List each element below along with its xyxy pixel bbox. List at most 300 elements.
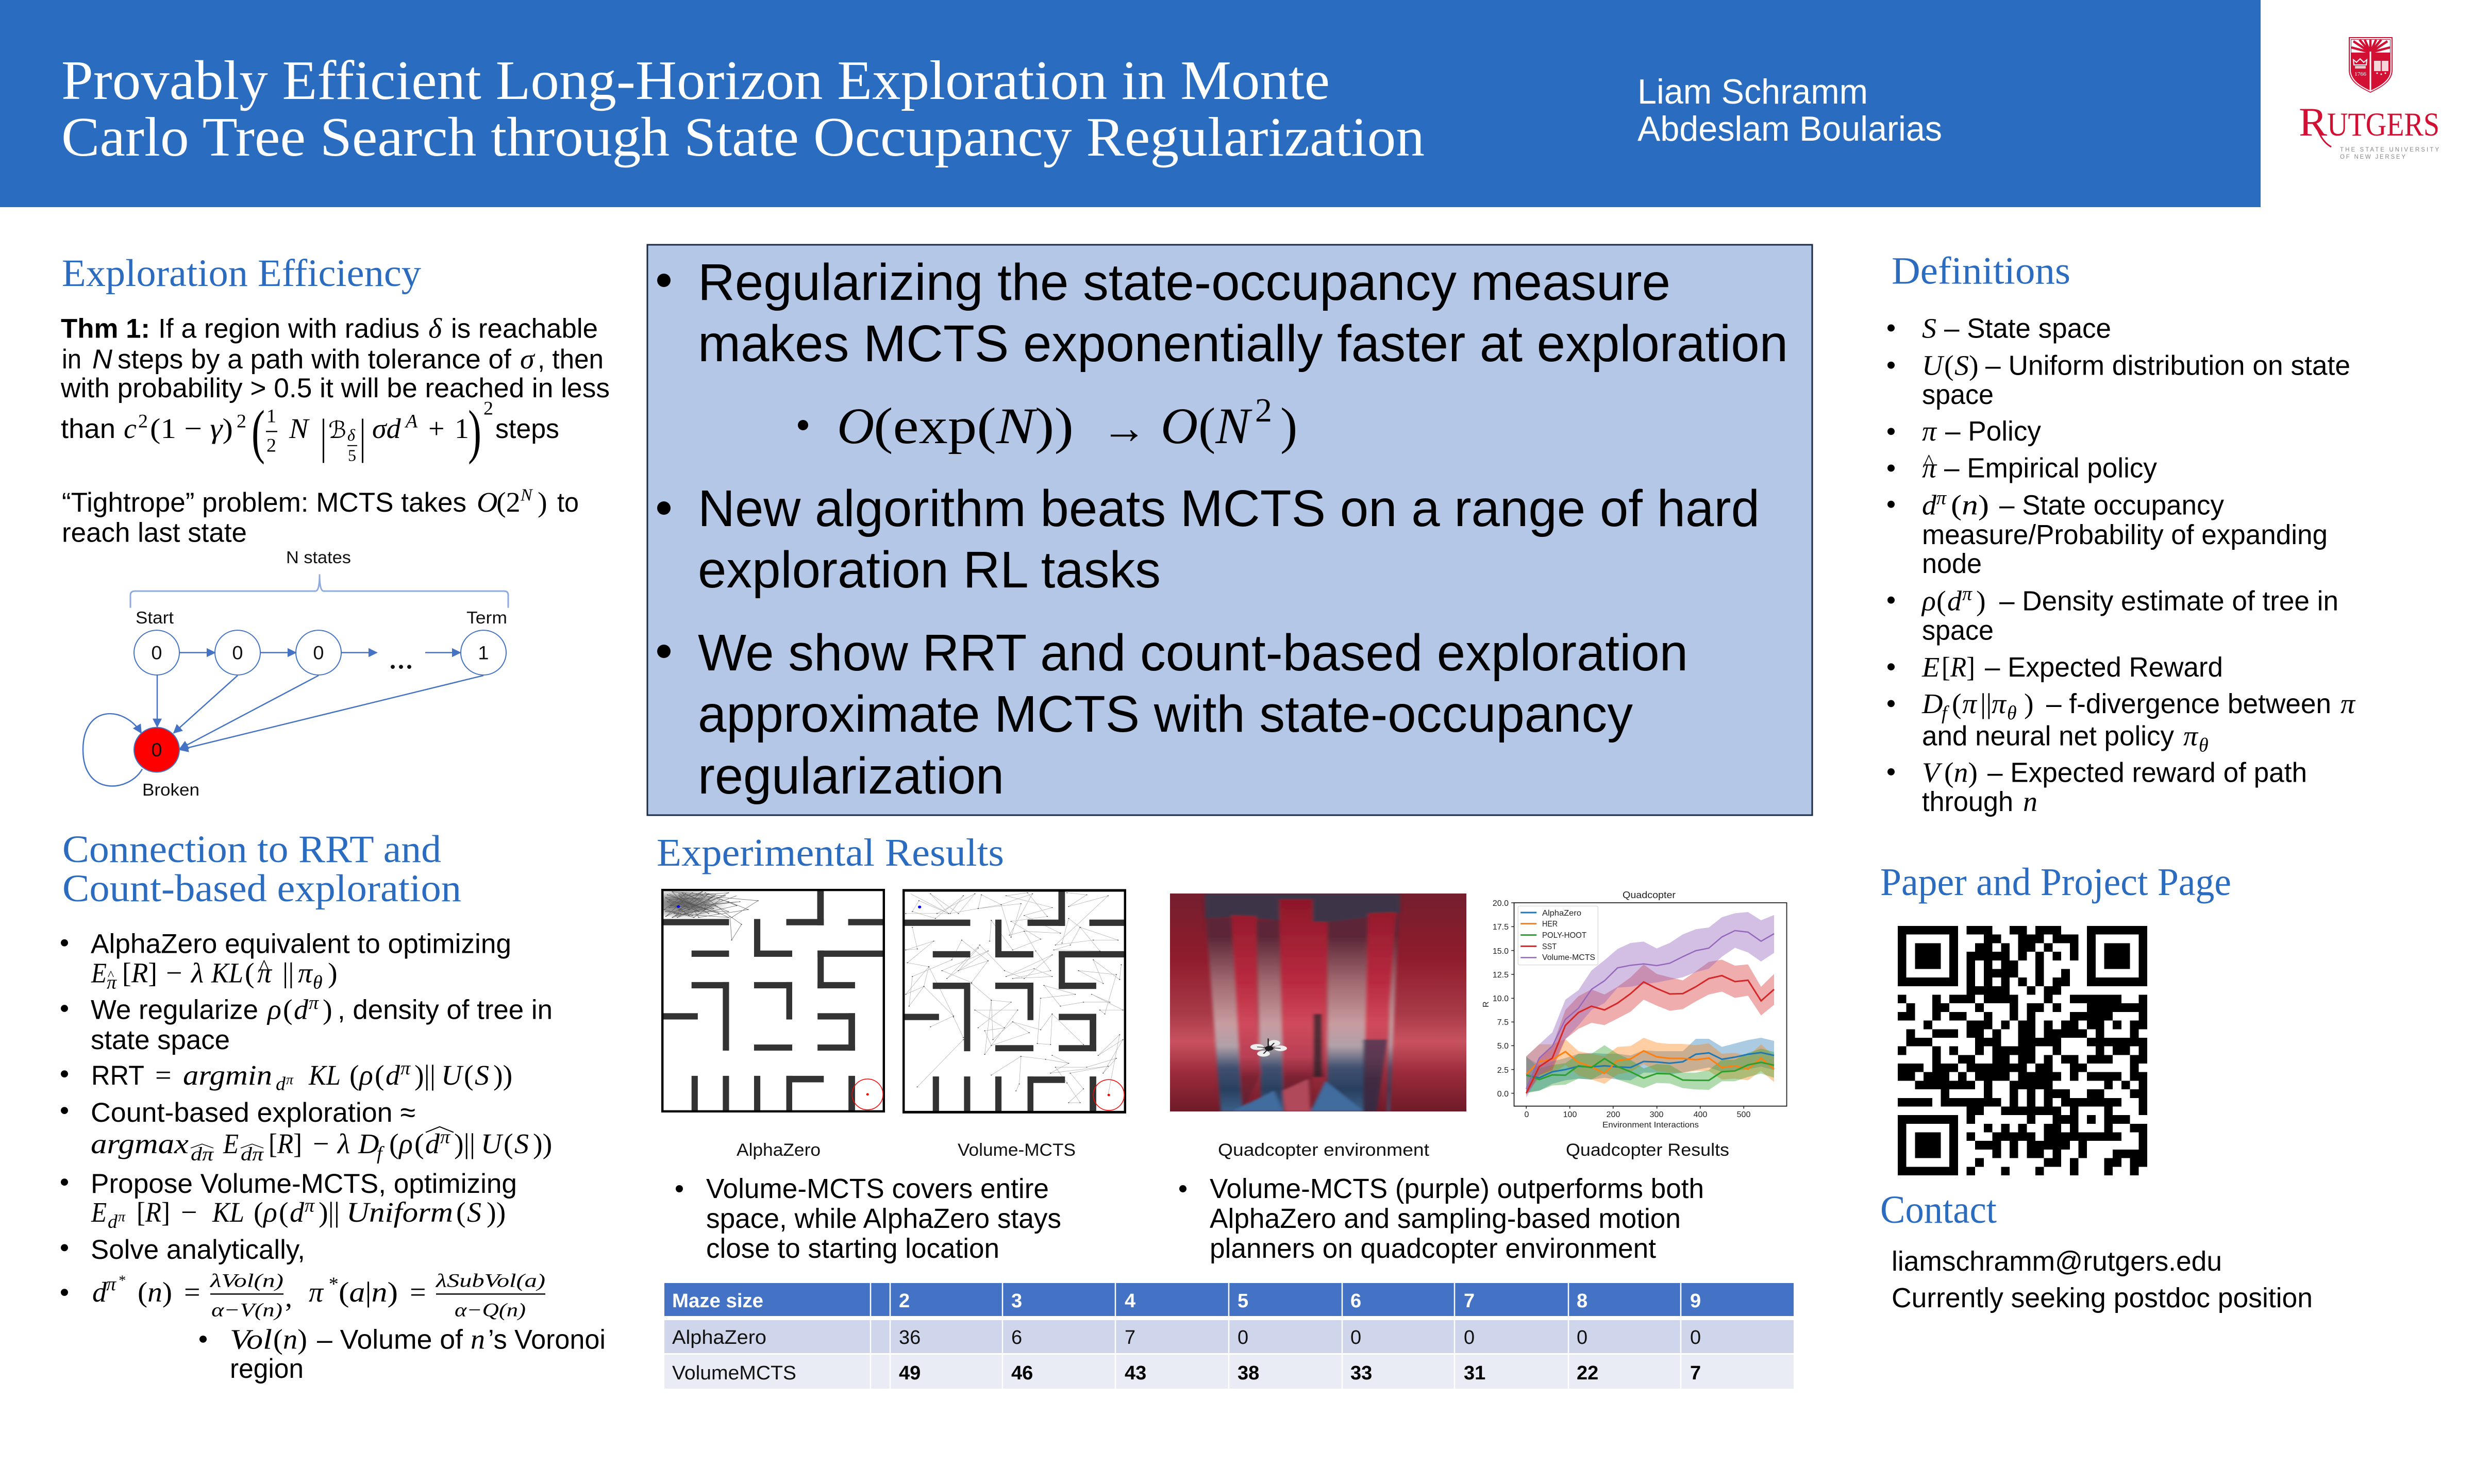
panel: connection to RRT	[61, 828, 606, 1384]
tightrope text: (2	[496, 486, 521, 518]
logo: Rutgers	[2299, 37, 2439, 160]
sub-bullet: Vol definition: – Volume of	[317, 1324, 463, 1355]
bullet: RRT: (	[464, 1059, 474, 1091]
bullet: Volume-MCTS objective: −	[181, 1196, 197, 1228]
line chart: quadcopter results: 10.0	[1493, 994, 1509, 1003]
bullet: count-based exploration: ))	[533, 1128, 552, 1160]
theorem text: steps by a path with tolerance of	[118, 344, 511, 375]
table: maze results: 6	[1350, 1290, 1361, 1312]
definitions list: d	[1947, 585, 1962, 617]
definitions list: V	[1922, 757, 1943, 789]
bullet: RRT: KL	[308, 1059, 341, 1091]
bullet: AlphaZero objective: ^	[259, 955, 269, 978]
diagram: tightrope chain	[83, 548, 508, 800]
line chart: quadcopter results: HER	[1542, 920, 1558, 929]
tightrope text: “Tightrope” problem: MCTS takes	[62, 487, 466, 518]
tightrope text	[62, 486, 579, 548]
table: maze results: 0	[1464, 1327, 1475, 1348]
bullet: RRT: d	[276, 1073, 286, 1095]
bullet: AlphaZero objective	[61, 929, 511, 993]
table: maze results: 46	[1011, 1362, 1033, 1384]
line chart: quadcopter results: Quadcopter	[1623, 890, 1676, 900]
takeaway 2: exploration RL tasks	[698, 541, 1161, 599]
definitions list: – Empirical policy	[1944, 453, 2157, 483]
table: maze results: 0	[1350, 1327, 1361, 1348]
bullet: closed-form equations: λVol(n)	[210, 1270, 283, 1291]
definitions list: through	[1922, 786, 2013, 817]
line chart: quadcopter results: 500	[1737, 1110, 1750, 1119]
QR code	[1898, 926, 2147, 1175]
takeaway 1	[657, 254, 1788, 373]
definitions list: π	[1936, 487, 1947, 509]
wordmark: UTGERS	[2327, 106, 2439, 143]
theorem text: (	[252, 399, 265, 465]
definitions list: )	[1976, 585, 1986, 617]
definitions list: ^	[1924, 450, 1934, 473]
definitions list: ρ	[1921, 585, 1936, 617]
theorem text: 2	[266, 435, 276, 457]
bullet: AlphaZero objective: π	[257, 957, 273, 989]
bullet: Volume-MCTS objective: KL	[212, 1196, 244, 1228]
line chart: quadcopter results: 100	[1563, 1110, 1577, 1119]
bullet: count-based exploration: U	[481, 1128, 504, 1160]
diagram: tightrope chain: 0	[232, 642, 243, 663]
bullet: Volume-MCTS objective: π	[118, 1209, 126, 1225]
theorem text: is reachable	[451, 313, 598, 344]
theorem text: σd	[372, 413, 401, 445]
bullet: regularize density: (	[283, 994, 293, 1026]
table: maze results: 43	[1125, 1362, 1146, 1384]
definitions list: S	[1954, 350, 1969, 381]
tightrope text: to	[557, 487, 579, 518]
theorem text: ℬ	[328, 416, 346, 444]
bullet: RRT: (	[375, 1059, 385, 1091]
tightrope text: N	[520, 486, 533, 504]
bullet: Volume-MCTS objective: E	[91, 1196, 107, 1228]
bullet: quadcopter finding: AlphaZero and sampling-based motion	[1210, 1203, 1681, 1234]
bullet: AlphaZero objective: AlphaZero equivalent to optimizing	[91, 929, 511, 959]
bullet: regularize density: , density of tree in	[338, 994, 553, 1025]
table: maze results: 36	[899, 1327, 921, 1348]
bullet: Volume-MCTS objective: [R]	[137, 1196, 170, 1228]
definitions list: π	[2183, 720, 2199, 752]
definitions list: – Expected reward of path	[1987, 757, 2307, 788]
definitions list: d	[1922, 490, 1936, 521]
theorem text: σ	[520, 343, 536, 375]
bullet: count-based exploration: )||	[454, 1128, 475, 1160]
theorem text: A	[404, 410, 418, 432]
theorem text: 1	[266, 406, 276, 427]
theorem text: , then	[538, 344, 604, 375]
bullet: AlphaZero objective: )	[328, 957, 338, 989]
table: maze results: 22	[1577, 1362, 1598, 1384]
table: maze results: 6	[1011, 1327, 1022, 1348]
bullet: AlphaZero objective: λ	[190, 957, 204, 989]
definitions list: measure/Probability of expanding	[1922, 519, 2328, 550]
complexity formula: (exp( N))	[874, 397, 1074, 454]
table: maze results: 7	[1464, 1290, 1475, 1312]
theorem text: with probability > 0.5 it will be reached in less	[60, 373, 610, 403]
bullet: closed-form equations: π	[309, 1276, 324, 1308]
heading: Contact	[1880, 1188, 1997, 1232]
bullet: regularize density: )	[323, 994, 332, 1026]
definitions list: (	[1944, 350, 1954, 381]
bullet: closed-form equations: ,	[285, 1281, 292, 1313]
heading: Exploration Efficiency	[62, 252, 421, 295]
line chart: quadcopter results: 200	[1607, 1110, 1620, 1119]
heading: Experimental Results	[657, 831, 1004, 874]
definitions list: U	[1922, 350, 1945, 381]
panel: contact	[1880, 1188, 2313, 1313]
title: Provably Efficient Long-Horizon Exploration in Monte	[61, 50, 1330, 111]
line chart: quadcopter results: 400	[1694, 1110, 1707, 1119]
definitions list: π	[1992, 688, 2007, 720]
bullet: closed-form equations: π	[106, 1273, 116, 1295]
table: maze results: AlphaZero	[672, 1327, 766, 1348]
bullet: AlphaZero objective: [R]	[122, 957, 157, 989]
line chart: quadcopter results: 7.5	[1497, 1018, 1509, 1027]
bullet: maze finding	[676, 1173, 1061, 1264]
line chart: quadcopter results: Volume-MCTS	[1542, 953, 1595, 962]
bullet: Volume-MCTS objective: (	[279, 1196, 289, 1228]
bullet: regularize density: state space	[91, 1024, 230, 1055]
bullet: count-based exploration: (	[414, 1128, 424, 1160]
bullet: RRT: S	[475, 1059, 489, 1091]
theorem text: c	[124, 413, 137, 445]
complexity formula	[798, 392, 1297, 454]
line chart: quadcopter results: SST	[1542, 942, 1557, 951]
definitions list: node	[1922, 548, 1982, 579]
contact details: Currently seeking postdoc position	[1892, 1283, 2313, 1313]
maze: AlphaZero	[661, 889, 885, 1112]
takeaway 2	[657, 480, 1760, 599]
complexity formula: (N	[1198, 397, 1252, 454]
bullet: Volume-MCTS objective: (	[254, 1196, 263, 1228]
takeaway 3: We show RRT and count-based exploration	[698, 624, 1688, 682]
bullet: RRT: d	[386, 1059, 400, 1091]
sub-bullet: Vol definition: (n)	[273, 1324, 307, 1355]
bullet: closed-form equations: d	[92, 1276, 107, 1308]
diagram: tightrope chain: 0	[313, 642, 324, 663]
table: maze results	[664, 1283, 1794, 1389]
table: maze results: 9	[1690, 1290, 1701, 1312]
bullet: closed-form equations: α−V(n)	[211, 1300, 282, 1321]
heading: Paper and Project Page	[1880, 861, 2231, 904]
line chart: quadcopter results: 20.0	[1493, 899, 1509, 908]
line chart: quadcopter results: R	[1482, 1001, 1491, 1007]
bullet: RRT: ))	[493, 1059, 512, 1091]
bullet: AlphaZero objective: ||	[282, 957, 294, 989]
definitions list: π	[1962, 583, 1972, 605]
bullet: AlphaZero objective: KL	[211, 957, 243, 989]
definitions list: – f-divergence between	[2046, 688, 2331, 719]
table: maze results: 0	[1577, 1327, 1587, 1348]
bullet: regularize density: π	[309, 992, 319, 1014]
bullet: RRT: π	[286, 1072, 294, 1088]
takeaway 3: regularization	[698, 747, 1004, 805]
bullet: Volume-MCTS objective: ))	[487, 1196, 506, 1228]
theorem text: N	[92, 344, 112, 375]
heading: Definitions	[1892, 250, 2070, 292]
bullet: count-based exploration: f	[377, 1142, 385, 1164]
bullet: RRT: argmin	[183, 1059, 272, 1091]
table: maze results: 2	[899, 1290, 910, 1312]
definitions list: E	[1921, 651, 1940, 683]
definitions list: – Uniform distribution on state	[1985, 350, 2350, 381]
bullet: count-based exploration: (	[389, 1128, 399, 1160]
bullet: closed-form equations: λSubVol(a)	[436, 1270, 545, 1291]
definitions list: space	[1922, 615, 1994, 646]
theorem text	[60, 313, 610, 465]
sub-bullet: Vol definition: ’s Voronoi	[488, 1324, 606, 1355]
bullet: maze finding: Volume-MCTS covers entire	[706, 1173, 1049, 1204]
panel: exploration efficiency	[60, 252, 610, 800]
complexity formula: )	[1280, 397, 1297, 454]
bullet: count-based exploration: −	[313, 1128, 329, 1160]
bullet: closed-form equations	[61, 1270, 545, 1321]
definitions list: – Expected Reward	[1985, 652, 2223, 683]
bullet: closed-form equations: =	[184, 1276, 200, 1308]
bullet: count-based exploration: dπ	[241, 1143, 264, 1165]
authors: Abdeslam Boularias	[1637, 109, 1942, 148]
definitions list: ||	[1980, 688, 1992, 720]
table: maze results: 0	[1690, 1327, 1701, 1348]
bullet: RRT: ρ	[358, 1059, 373, 1091]
definitions list: π	[1922, 415, 1937, 447]
diagram: tightrope chain: Term	[466, 608, 507, 628]
icon: shield: 1766	[2354, 71, 2367, 77]
table: maze results: 8	[1577, 1290, 1587, 1312]
authors	[1637, 72, 1942, 148]
line chart: quadcopter results: 0	[1525, 1110, 1529, 1119]
contact details	[1892, 1246, 2313, 1313]
bullet: count-based exploration: dπ	[191, 1143, 214, 1165]
wordmark: R	[2299, 99, 2327, 144]
caption: quadcopter environment: Quadcopter environment	[1218, 1140, 1430, 1160]
table: maze results: 33	[1350, 1362, 1372, 1384]
definitions list: n	[2023, 786, 2037, 818]
bullet: closed-form equations: (a|n)	[339, 1276, 398, 1308]
panel: key takeaways	[647, 245, 1812, 815]
table: maze results: VolumeMCTS	[672, 1362, 796, 1384]
bullet: RRT: (	[349, 1059, 359, 1091]
bullet: Volume-MCTS objective: Uniform	[346, 1196, 453, 1228]
bullet: count-based exploration: Count-based exploration ≈	[91, 1097, 415, 1128]
bullet: solve analytically: Solve analytically,	[91, 1234, 305, 1265]
wordmark: THE STATE UNIVERSITY	[2340, 147, 2439, 153]
line chart: quadcopter results: 5.0	[1497, 1042, 1509, 1051]
theorem text: δ	[347, 426, 356, 444]
table: maze results: 7	[1125, 1327, 1135, 1348]
bullet: regularize density: d	[294, 994, 308, 1026]
definitions list: f	[1942, 702, 1949, 724]
table: maze results: 38	[1238, 1362, 1259, 1384]
takeaway 3	[657, 624, 1688, 805]
bullet: regularize density: ρ	[266, 994, 281, 1026]
bullet: Volume-MCTS objective: ρ	[262, 1196, 277, 1228]
definitions list: π	[1962, 688, 1978, 720]
complexity formula: O	[1161, 397, 1198, 454]
bullet: quadcopter finding: Volume-MCTS (purple) outperforms both	[1210, 1173, 1704, 1204]
line chart: quadcopter results: 12.5	[1493, 971, 1509, 980]
bullet: Volume-MCTS objective: (	[456, 1196, 466, 1228]
complexity formula: 2	[1255, 392, 1272, 429]
line chart: quadcopter results: 0.0	[1497, 1090, 1509, 1099]
takeaway 1: Regularizing the state-occupancy measure	[698, 254, 1670, 311]
table: maze results: 4	[1125, 1290, 1135, 1312]
table: maze results: 7	[1690, 1362, 1701, 1384]
definitions list: [R]	[1942, 651, 1975, 683]
definitions list: θ	[2007, 702, 2017, 724]
caption: quadcopter results: Quadcopter Results	[1566, 1140, 1729, 1160]
definitions list: π	[2341, 688, 2356, 720]
bullet: Volume-MCTS objective: d	[108, 1211, 118, 1233]
panel: definitions	[1887, 250, 2356, 818]
definitions list: – State occupancy	[1999, 490, 2224, 520]
table: maze results: 31	[1464, 1362, 1485, 1384]
heading: Connection to RRT and	[62, 828, 441, 871]
bullet: regularize density: We regularize	[91, 994, 258, 1025]
theorem text: δ	[428, 313, 442, 344]
bullet: count-based exploration: λ	[337, 1128, 350, 1160]
bullet: Volume-MCTS objective	[61, 1168, 517, 1233]
table: maze results: 3	[1011, 1290, 1022, 1312]
definitions list: space	[1922, 379, 1994, 410]
theorem text: 2	[237, 410, 246, 432]
title	[61, 50, 1425, 168]
diagram: tightrope chain: N states	[286, 548, 351, 567]
theorem text: 2	[138, 410, 148, 432]
definitions list: (	[1936, 585, 1946, 617]
table: maze results: 5	[1238, 1290, 1248, 1312]
bullet: AlphaZero objective: ^	[108, 968, 114, 983]
bullet: closed-form equations: (n)	[138, 1276, 172, 1308]
bullet: count-based exploration: argmax	[91, 1128, 189, 1160]
theorem text: in	[62, 344, 81, 375]
theorem text: N	[289, 413, 310, 445]
theorem text: )	[468, 399, 481, 465]
definitions list: and neural net policy	[1922, 721, 2174, 751]
table: maze results: Maze size	[672, 1290, 763, 1312]
definitions list: – Policy	[1945, 416, 2041, 447]
tightrope text: O	[477, 486, 497, 518]
bullet: AlphaZero objective: −	[166, 957, 182, 989]
theorem text: steps	[495, 413, 559, 444]
complexity formula: →	[1101, 403, 1147, 453]
bullet: Volume-MCTS objective: )||	[319, 1196, 340, 1228]
panel: paper and project page	[1880, 861, 2231, 1175]
image: quadcopter environment	[1170, 893, 1466, 1111]
bullet: closed-form equations: *	[118, 1273, 125, 1288]
theorem text: 2	[483, 398, 493, 419]
bullet: AlphaZero objective: E	[91, 957, 107, 989]
bullet: count-based exploration: (	[504, 1128, 513, 1160]
theorem text: (1 − γ)	[150, 413, 233, 445]
tightrope text: )	[538, 486, 547, 518]
theorem text: 1	[455, 413, 469, 445]
bullet: RRT	[61, 1057, 512, 1095]
definitions list: (n)	[1951, 490, 1989, 521]
line chart: quadcopter results: 2.5	[1497, 1066, 1509, 1075]
maze: Volume-MCTS	[902, 889, 1126, 1114]
bullet: RRT: π	[400, 1057, 411, 1079]
definitions list: )	[1969, 350, 1979, 381]
bullet: maze finding: close to starting location	[706, 1233, 999, 1264]
complexity formula: O	[837, 397, 874, 454]
bullet: count-based exploration: S	[514, 1128, 529, 1160]
diagram: tightrope chain: 0	[151, 739, 162, 761]
diagram: tightrope chain: Broken	[142, 780, 199, 800]
bullet: quadcopter finding	[1179, 1173, 1704, 1264]
tightrope text: reach last state	[62, 517, 247, 548]
definitions list: (	[1952, 688, 1962, 720]
bullet: closed-form equations: α−Q(n)	[455, 1300, 526, 1321]
sub-bullet: Vol definition: region	[230, 1353, 304, 1384]
takeaway 1: makes MCTS exponentially faster at exploration	[698, 315, 1788, 373]
bullet: RRT: RRT	[91, 1060, 144, 1091]
definitions list: – Density estimate of tree in	[1999, 586, 2338, 616]
table: maze results: 49	[899, 1362, 921, 1384]
bullet: Volume-MCTS objective: d	[290, 1196, 304, 1228]
bullet: quadcopter finding: planners on quadcopter environment	[1210, 1233, 1656, 1264]
definitions list: )	[2024, 688, 2034, 720]
bullet: Volume-MCTS objective: Propose Volume-MCTS, optimizing	[91, 1168, 517, 1199]
bullet: closed-form equations: *	[328, 1273, 338, 1295]
definitions list: D	[1921, 688, 1943, 720]
line chart: quadcopter results: POLY-HOOT	[1542, 931, 1586, 940]
diagram: tightrope chain: 0	[151, 642, 162, 663]
bullet: RRT: U	[441, 1059, 464, 1091]
definitions list: π	[1922, 452, 1937, 484]
bullet: count-based exploration: D	[358, 1128, 379, 1160]
bullet: count-based exploration: ρ	[398, 1128, 413, 1160]
bullet: RRT: )||	[414, 1059, 436, 1091]
takeaway 2: New algorithm beats MCTS on a range of hard	[698, 480, 1760, 537]
theorem text: Thm 1:	[61, 313, 150, 344]
heading	[62, 828, 461, 910]
contact details: liamschramm@rutgers.edu	[1892, 1246, 2222, 1277]
definitions list: θ	[2199, 735, 2209, 756]
theorem text: +	[428, 413, 445, 445]
bullet: Volume-MCTS objective: S	[467, 1196, 481, 1228]
caption: AlphaZero: AlphaZero	[737, 1140, 821, 1160]
takeaway 3: approximate MCTS with state-occupancy	[698, 685, 1633, 743]
wordmark: OF NEW JERSEY	[2340, 154, 2405, 160]
diagram: tightrope chain: 1	[478, 642, 489, 663]
bullet: count-based exploration: π	[440, 1126, 450, 1148]
definitions list: S	[1922, 313, 1936, 344]
line chart: quadcopter results: 15.0	[1493, 947, 1509, 956]
bullet: regularize density	[61, 992, 553, 1055]
definitions list: – State space	[1944, 313, 2111, 344]
table: maze results: 0	[1238, 1327, 1248, 1348]
diagram: tightrope chain: Start	[136, 608, 174, 628]
theorem text: If a region with radius	[158, 313, 420, 344]
line chart: quadcopter results: AlphaZero	[1542, 909, 1581, 918]
bullet: count-based exploration	[61, 1097, 552, 1165]
bullet: AlphaZero objective: θ	[313, 972, 323, 993]
wordmark	[2299, 99, 2439, 160]
definitions list: (n)	[1944, 757, 1978, 789]
bullet: closed-form equations: =	[410, 1276, 426, 1308]
line chart: quadcopter results: 300	[1650, 1110, 1663, 1119]
header banner	[0, 0, 2261, 207]
bullet: count-based exploration: d	[425, 1128, 440, 1160]
line chart: quadcopter results: Environment Interactions	[1602, 1121, 1699, 1129]
bullet: AlphaZero objective: π	[298, 957, 313, 989]
bullet: count-based exploration: E	[223, 1128, 239, 1160]
caption: Volume-MCTS: Volume-MCTS	[958, 1140, 1076, 1160]
